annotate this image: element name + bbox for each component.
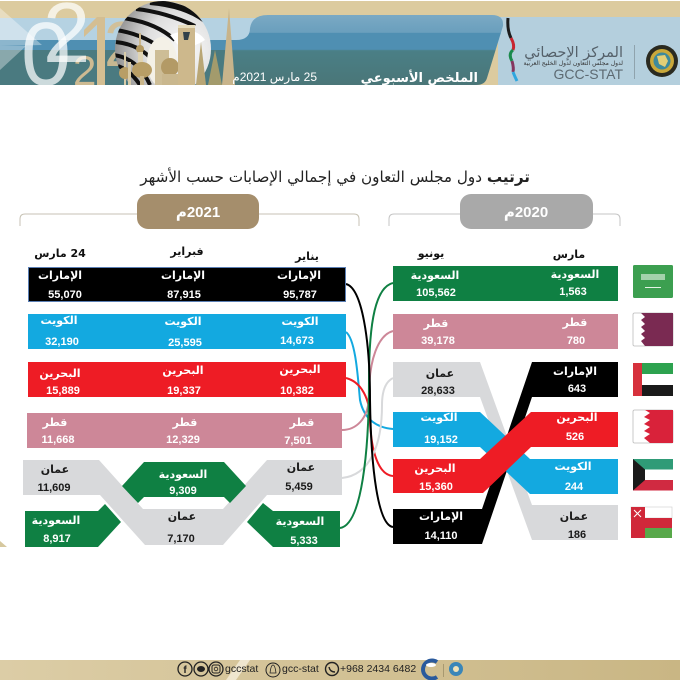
2021 row: UAE: الإمارات bbox=[277, 269, 321, 282]
2020 band: Oman: 186 bbox=[568, 529, 586, 541]
2021 row: Kuwait: الكويت bbox=[41, 314, 77, 327]
2021 row: Kuwait: الكويت bbox=[165, 315, 201, 328]
2021 band: Saudi Arabia: 9,309 bbox=[169, 485, 197, 497]
2020 band: UAE bbox=[393, 362, 618, 544]
2021 band: Oman: عمان bbox=[41, 463, 69, 476]
2020 band: Kuwait: الكويت bbox=[421, 411, 457, 424]
2021 row: Bahrain: 19,337 bbox=[167, 385, 201, 397]
month headers: 24 مارس bbox=[34, 247, 86, 260]
2020 band: Oman: عمان bbox=[560, 510, 588, 523]
2021 band: Oman: عمان bbox=[287, 461, 315, 474]
pill 2021 bbox=[137, 194, 259, 229]
header blue panel bbox=[225, 15, 503, 85]
2021 row: Kuwait: 14,673 bbox=[280, 335, 314, 347]
flag: Saudi Arabia bbox=[633, 265, 673, 298]
2021 row: Bahrain: 10,382 bbox=[280, 385, 314, 397]
2020 band: Bahrain: البحرين bbox=[556, 411, 598, 424]
flag: Kuwait bbox=[633, 459, 673, 490]
2021 band: Saudi Arabia: 8,917 bbox=[43, 533, 71, 545]
2020 row: Qatar: قطر bbox=[562, 316, 587, 329]
2020 row: Qatar: قطر bbox=[423, 317, 448, 330]
2021 row: UAE bbox=[28, 268, 346, 302]
2021 band: Oman: 5,459 bbox=[285, 481, 313, 493]
decorative year numerals bbox=[0, 2, 124, 85]
month headers: مارس bbox=[553, 248, 585, 261]
2020 band: Bahrain: 526 bbox=[566, 431, 584, 443]
2021 band: Saudi Arabia: السعودية bbox=[159, 468, 207, 481]
icon: facebook: f bbox=[183, 665, 187, 676]
2020 band: Kuwait: الكويت bbox=[555, 460, 591, 473]
2021 row: Qatar: 12,329 bbox=[166, 434, 200, 446]
2021 row: UAE: 55,070 bbox=[48, 289, 82, 301]
2020 band: Oman: عمان bbox=[426, 367, 454, 380]
GCC-STAT logo text bbox=[524, 46, 623, 79]
2021 row: Bahrain: 15,889 bbox=[46, 385, 80, 397]
month headers: يونيو bbox=[417, 247, 444, 260]
pill 2020 bbox=[460, 194, 593, 229]
weekly summary heading: الملخص الأسبوعي bbox=[361, 69, 478, 86]
decorative year numerals: 2 bbox=[104, 8, 140, 80]
2020 band: Bahrain: البحرين bbox=[414, 462, 456, 475]
2020 row: Qatar: 780 bbox=[567, 335, 585, 347]
pill 2020: 2020م bbox=[504, 204, 548, 221]
icon: instagram bbox=[209, 662, 223, 676]
2020 band: UAE: 643 bbox=[568, 383, 586, 395]
2021 row: Qatar bbox=[27, 413, 342, 448]
2020 band: Kuwait: 244 bbox=[565, 481, 584, 493]
2021 row: Bahrain: البحرين bbox=[279, 363, 321, 376]
2020 row: Saudi Arabia: السعودية bbox=[411, 269, 459, 282]
2021 row: Qatar: 7,501 bbox=[284, 435, 312, 447]
2021 band: Saudi Arabia: السعودية bbox=[32, 514, 80, 527]
bracket 2021 bbox=[20, 214, 359, 226]
icon: twitter bbox=[194, 662, 208, 676]
GCC-STAT logo text: GCC-STAT bbox=[554, 66, 623, 82]
2021 band: Oman: 7,170 bbox=[167, 533, 195, 545]
2021 row: Kuwait: الكويت bbox=[282, 315, 318, 328]
gulf towers skyline bbox=[119, 8, 235, 87]
2021 row: Qatar: قطر bbox=[42, 416, 67, 429]
snapchat handle: gcc-stat bbox=[282, 663, 319, 675]
decorative corner mark bbox=[0, 541, 7, 547]
GCC-STAT logo text: المركز الإحصائي bbox=[524, 45, 623, 61]
2020 band: Kuwait bbox=[393, 411, 618, 494]
2021 row: UAE: 95,787 bbox=[283, 289, 317, 301]
bracket 2020 bbox=[389, 214, 620, 226]
date: 25 مارس 2021م bbox=[232, 70, 317, 85]
GCC-STAT logo text: لدول مجلس التعاون لدول الخليج العربية bbox=[524, 60, 623, 67]
2021 band: Saudi Arabia bbox=[25, 462, 340, 547]
2020 band: Oman: 28,633 bbox=[421, 385, 455, 397]
2020 row: Qatar bbox=[393, 314, 618, 349]
2021 row: Bahrain bbox=[28, 362, 346, 397]
flag: UAE bbox=[633, 363, 673, 396]
2021 row: Qatar: قطر bbox=[289, 416, 314, 429]
2020 row: Saudi Arabia: 1,563 bbox=[559, 286, 587, 298]
2021 row: Kuwait: 32,190 bbox=[45, 336, 79, 348]
2020 band: UAE: 14,110 bbox=[424, 530, 458, 542]
connector curves between 2020 and 2021 bbox=[340, 283, 393, 528]
2021 band: Oman bbox=[23, 460, 342, 545]
2020 row: Qatar: 39,178 bbox=[421, 335, 455, 347]
GCC emblem bbox=[646, 45, 678, 77]
footer bar bbox=[0, 660, 680, 680]
2021 row: UAE: الإمارات bbox=[38, 269, 82, 282]
flag: Bahrain bbox=[633, 410, 673, 443]
2021 row: Kuwait: 25,595 bbox=[168, 337, 202, 349]
2021 band: Saudi Arabia: 5,333 bbox=[290, 535, 318, 547]
decorative year numerals: 2 bbox=[73, 47, 96, 94]
2020 band: UAE: الإمارات bbox=[553, 365, 597, 378]
social handle: gccstat bbox=[225, 663, 258, 675]
2021 row: Bahrain: البحرين bbox=[39, 367, 81, 380]
phone number: +968 2434 6482 bbox=[340, 663, 416, 675]
icon: quality logo bbox=[423, 660, 437, 678]
icon: whatsapp bbox=[326, 662, 338, 676]
2020 band: Bahrain: 15,360 bbox=[419, 481, 453, 493]
icon: TUV seal bbox=[449, 662, 463, 676]
2020 band: Bahrain bbox=[393, 411, 618, 493]
2021 row: Qatar: 11,668 bbox=[41, 434, 75, 446]
pill 2021: 2021م bbox=[176, 204, 220, 221]
month headers: فبراير bbox=[169, 245, 204, 258]
2021 row: Kuwait bbox=[28, 314, 346, 349]
2021 band: Oman: عمان bbox=[168, 510, 196, 523]
month headers bbox=[34, 245, 585, 263]
globe bbox=[115, 1, 211, 85]
2020 band: Kuwait: 19,152 bbox=[424, 434, 458, 446]
2020 band: Oman bbox=[393, 362, 618, 541]
icon: snapchat bbox=[266, 663, 280, 677]
decorative year numerals: 0 bbox=[21, 5, 71, 105]
flag: Qatar bbox=[633, 313, 673, 346]
2021 row: UAE: 87,915 bbox=[167, 289, 201, 301]
2020 band: UAE: الإمارات bbox=[419, 510, 463, 523]
2021 row: Qatar: قطر bbox=[172, 416, 197, 429]
month headers: يناير bbox=[294, 250, 319, 263]
main title: ترتيب دول مجلس التعاون في إجمالي الإصابات حسب الأشهر bbox=[139, 167, 530, 187]
flag: Oman bbox=[631, 507, 672, 538]
icon: facebook bbox=[178, 662, 192, 676]
2021 band: Oman: 11,609 bbox=[37, 482, 71, 494]
header banner bbox=[0, 1, 680, 85]
2021 row: Bahrain: البحرين bbox=[162, 364, 204, 377]
2021 band: Saudi Arabia: السعودية bbox=[276, 515, 324, 528]
2020 row: Saudi Arabia bbox=[393, 266, 618, 301]
2021 row: UAE: الإمارات bbox=[161, 269, 205, 282]
ribbon logo mark bbox=[508, 18, 517, 81]
2020 row: Saudi Arabia: السعودية bbox=[551, 268, 599, 281]
2020 row: Saudi Arabia: 105,562 bbox=[416, 287, 456, 299]
